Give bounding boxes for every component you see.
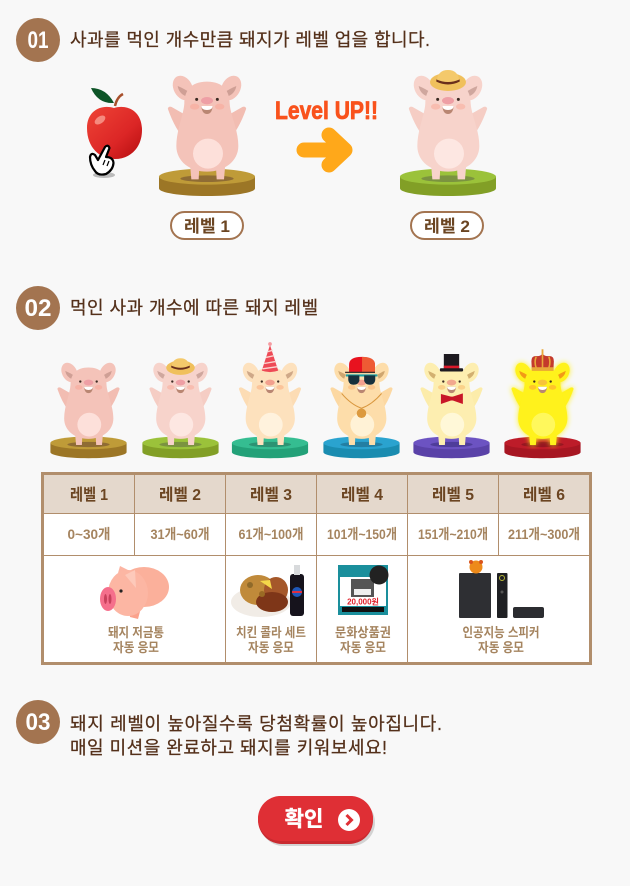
prize: AI speaker: [459, 560, 544, 655]
icon: apple with hand cursor: [87, 88, 142, 178]
prize: piggy bank: [100, 566, 169, 655]
prize: chicken and cola: 자동 응모: [248, 640, 294, 655]
step 02 heading: 먹인 사과 개수에 따른 돼지 레벨: [70, 298, 318, 318]
step 03 heading: [16, 700, 442, 758]
prize: piggy bank: 자동 응모: [113, 640, 159, 655]
text: Level UP: Level UP!!: [275, 97, 378, 125]
pig level 1: [50, 360, 127, 458]
prize: culture gift card: 자동 응모: [340, 640, 386, 655]
pig lineup: [50, 342, 581, 458]
step 01 heading: [16, 18, 430, 62]
prize: chicken and cola: [231, 565, 306, 655]
step 02 heading: 02: [24, 295, 52, 322]
prize: culture gift card: 20,000원: [347, 596, 379, 606]
table header: [70, 486, 565, 504]
table header: 레벨 2: [159, 486, 201, 504]
table header: 레벨 6: [523, 486, 565, 504]
label: level 2: [411, 212, 483, 239]
step 03 heading: 매일 미션을 완료하고 돼지를 키워보세요!: [70, 738, 387, 758]
prize: culture gift card: [335, 565, 391, 655]
step 02 heading: [16, 286, 318, 330]
table header: 레벨 1: [70, 486, 108, 504]
table apple ranges: 101개~150개: [327, 526, 397, 542]
character: level 2 pig with straw hat: [400, 70, 496, 196]
prize: culture gift card: 문화상품권: [335, 625, 391, 640]
prize: AI speaker: 인공지능 스피커: [462, 625, 540, 640]
button: confirm: [258, 796, 375, 846]
label: level 1: [171, 212, 243, 239]
table header: 레벨 5: [432, 486, 474, 504]
table header: 레벨 4: [341, 486, 383, 504]
table apple ranges: 31개~60개: [150, 526, 210, 542]
table apple ranges: [68, 526, 580, 542]
table apple ranges: 0~30개: [68, 526, 110, 542]
label: level 2: 레벨 2: [424, 217, 470, 236]
pig level 5 with top hat and bow tie: [413, 354, 490, 458]
pig level 4 with cap and sunglasses: [323, 357, 400, 458]
pig level 3 with party hat: [232, 342, 308, 458]
step 01 heading: 01: [28, 27, 48, 54]
table apple ranges: 151개~210개: [418, 526, 488, 542]
pig level 2: [142, 358, 219, 458]
prize: piggy bank: 돼지 저금통: [108, 625, 164, 640]
step 03 heading: 돼지 레벨이 높아질수록 당첨확률이 높아집니다.: [70, 714, 442, 734]
prize: chicken and cola: 치킨 콜라 세트: [236, 625, 306, 640]
table header: 레벨 3: [250, 486, 292, 504]
arrow: [304, 135, 345, 165]
prize: AI speaker: 자동 응모: [478, 640, 524, 655]
character: level 1 pig: [159, 72, 255, 196]
table: level rewards: [42, 474, 590, 664]
table apple ranges: 211개~300개: [508, 526, 580, 542]
step 01 heading: 사과를 먹인 개수만큼 돼지가 레벨 업을 합니다.: [70, 30, 430, 50]
table apple ranges: 61개~100개: [238, 526, 304, 542]
step 03 heading: 03: [26, 709, 50, 736]
label: level 1: 레벨 1: [184, 217, 230, 236]
button: confirm: 확인: [285, 808, 323, 831]
pig level 6 golden with crown: [504, 349, 581, 458]
